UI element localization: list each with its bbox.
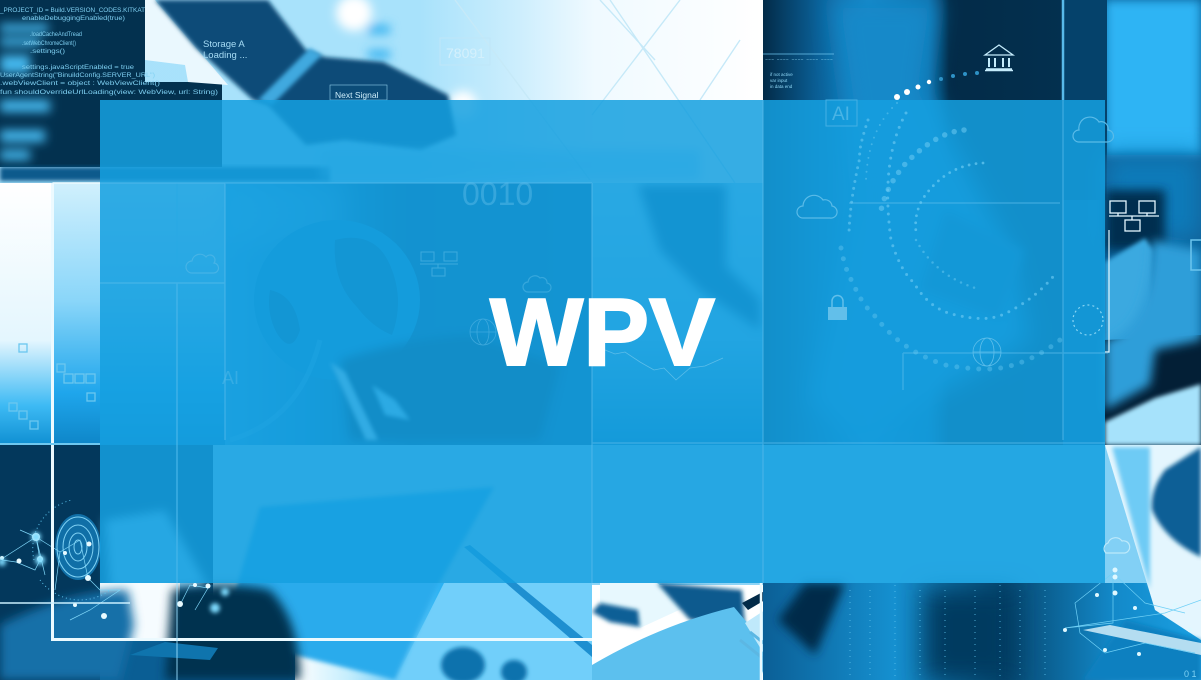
overlay text: code lines: _PROJECT_ID = Build.VERSION_CODES.KITKAT [0, 8, 145, 14]
panel overlay: faint grid lines [100, 100, 1108, 583]
chart line [600, 348, 723, 380]
background photo: top left, hand on tablet [0, 0, 763, 183]
icon: globe outline [973, 338, 1001, 366]
background photo: bottom left, fingerprint network and hand [0, 445, 592, 680]
icon: faint network in panel [420, 252, 458, 276]
panel overlay: faint AI labels: AI [832, 104, 850, 125]
network nodes [0, 530, 229, 620]
overlay text: next signal [330, 85, 387, 100]
overlay text: code lines: .setWebChromeClient() [22, 41, 76, 47]
icon: lock [828, 296, 847, 320]
small squares [9, 344, 95, 429]
overlay text: code lines: settings.javaScriptEnabled = true [22, 65, 135, 71]
overlay text: code lines [0, 8, 218, 96]
overlay code: top right [763, 54, 834, 89]
translucent blue panel [100, 100, 1105, 583]
icon: side box [1191, 240, 1201, 270]
title: WPV [490, 279, 715, 386]
overlay text: code lines: .webViewClient = object : WebViewClient() [0, 81, 160, 87]
overlay text from photo: storage label: Loading ... [203, 50, 247, 61]
fingerprint [33, 500, 110, 600]
overlay text: next signal: Next Signal [335, 90, 379, 100]
overlay text: code lines: enableDebuggingEnabled(true) [22, 16, 125, 22]
background photo: bottom right, hands with pen and data streams [592, 445, 1201, 680]
overlay code: top right: var input [770, 78, 788, 83]
panel overlay: faint AI labels [222, 100, 857, 388]
overlay code: top right: in data end [770, 84, 793, 89]
overlay code: top right: --- ---- ---- ---- ---- [765, 57, 834, 62]
overlay text from photo: storage label: Storage A [203, 39, 245, 50]
panel overlay: dotted circles [841, 103, 1060, 369]
panel overlay: faint AI labels: AI [222, 368, 239, 388]
overlay text: 78091: 78091 [446, 45, 485, 61]
overlay text: code lines: fun shouldOverrideUrlLoading(view: WebView, url: String) [0, 90, 218, 96]
overlay text: 78091 [440, 38, 490, 65]
icon: bank [985, 45, 1013, 70]
background photo: bottom right, hands with pen and data streams: 0 1 [1184, 669, 1197, 679]
overlay text: code lines: .settings() [30, 49, 65, 55]
overlay code: top right: if not active [770, 72, 793, 77]
icon: clouds [186, 117, 1130, 553]
overlay text: code lines: .loadCacheAndTread [30, 32, 82, 38]
icon: network computers right side [1109, 201, 1159, 231]
overlay text from photo: storage label [203, 39, 247, 61]
overlay text: code lines: UserAgentString("BinuildConfig.SERVER_URL") [0, 73, 155, 79]
panel overlay: faint AI labels: 0010 [462, 176, 533, 212]
background photo: middle row, globe and hands [0, 183, 763, 445]
panel overlay: bright dots [894, 80, 931, 100]
icon: faint globe in panel [470, 319, 496, 345]
background photo: top right, person with phone [763, 0, 1201, 445]
